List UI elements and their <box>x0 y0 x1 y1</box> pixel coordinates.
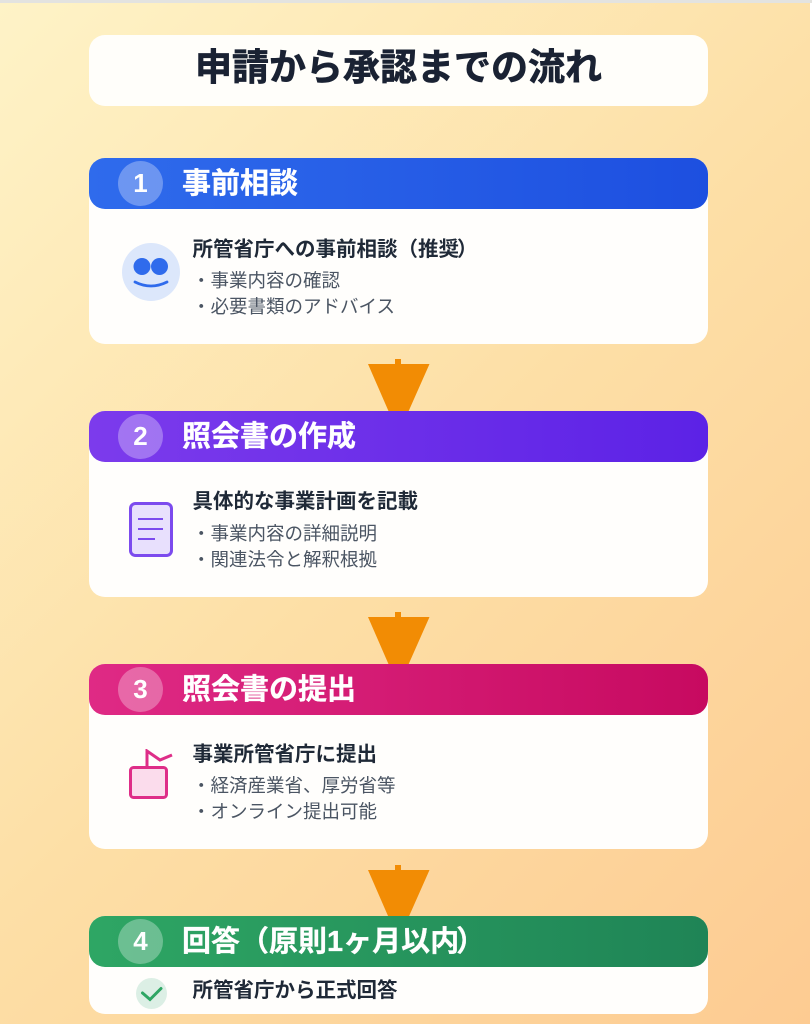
step 1 number: 1 <box>133 168 148 198</box>
arrow: step 1 to 2 <box>368 359 430 411</box>
step 4 header <box>89 916 708 967</box>
step 4 heading: 回答（原則1ヶ月以内） <box>182 926 485 958</box>
step 1 number <box>118 161 163 206</box>
panel: step 1 <box>89 158 708 344</box>
arrow: step 2 to 3 <box>368 612 430 664</box>
step 3 bullet list <box>192 775 396 822</box>
step 1 bullet list <box>192 270 395 317</box>
step 3 number: 3 <box>133 674 148 704</box>
step 2 number: 2 <box>133 421 148 451</box>
step 1 bullet list: ・必要書類のアドバイス <box>192 296 395 317</box>
panel: step 2 <box>89 411 708 597</box>
step 4 number <box>118 919 163 964</box>
step 1 bullet list: ・事業内容の確認 <box>192 270 340 291</box>
step 1 heading: 事前相談 <box>182 168 298 200</box>
step 2 number <box>118 414 163 459</box>
panel: step 4 <box>89 916 708 1014</box>
step 3 header <box>89 664 708 715</box>
step 2 bullet list: ・関連法令と解釈根拠 <box>192 549 377 570</box>
step 2 subheading: 具体的な事業計画を記載 <box>192 490 418 513</box>
step 4 subheading: 所管省庁から正式回答 <box>192 979 398 1002</box>
step 1 subheading: 所管省庁への事前相談（推奨） <box>192 238 478 261</box>
step 4 number: 4 <box>133 926 148 956</box>
step 3 bullet list: ・経済産業省、厚労省等 <box>192 775 396 796</box>
step 1 header <box>89 158 708 209</box>
step 2 bullet list: ・事業内容の詳細説明 <box>192 523 377 544</box>
step 2 heading: 照会書の作成 <box>182 421 356 453</box>
panel: step 3 <box>89 664 708 849</box>
arrow: step 3 to 4 <box>368 865 430 916</box>
icon: check mark <box>136 978 167 1009</box>
title panel <box>89 35 708 106</box>
step 3 heading: 照会書の提出 <box>182 674 356 706</box>
step 2 header <box>89 411 708 462</box>
step 3 number <box>118 667 163 712</box>
icon: submission tray <box>129 749 172 799</box>
step 3 subheading: 事業所管省庁に提出 <box>192 743 377 766</box>
icon: document <box>129 502 173 557</box>
title panel: 申請から承認までの流れ <box>195 47 602 88</box>
step 2 bullet list <box>192 523 377 570</box>
icon: smiling face <box>122 243 180 301</box>
step 3 bullet list: ・オンライン提出可能 <box>192 801 377 822</box>
